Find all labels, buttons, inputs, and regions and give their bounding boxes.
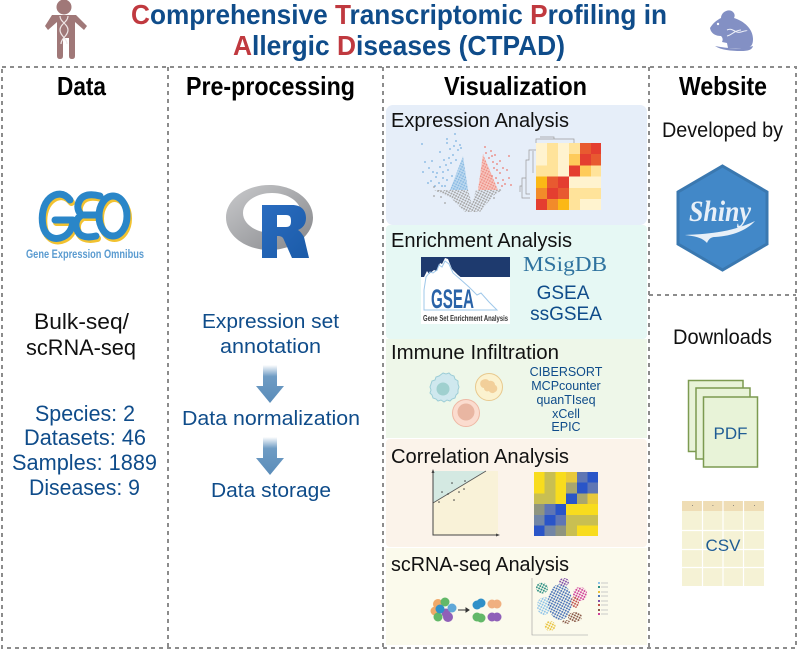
immune methods: CIBERSORT [530, 365, 603, 379]
heading: scRNA-seq analysis: scRNA-seq Analysis [391, 554, 569, 576]
title line 2: Allergic Diseases (CTPAD) [233, 30, 565, 61]
sequencing types [26, 309, 136, 360]
title [131, 0, 667, 61]
GSEA logo [421, 257, 510, 324]
step: expression set annotation: Expression set [202, 310, 339, 333]
panel: website column [662, 71, 783, 586]
CSV table [682, 501, 764, 586]
PDF document stack [688, 380, 758, 467]
step: data storage: Data storage [211, 479, 331, 502]
GSEA methods: ssGSEA [530, 304, 602, 325]
heading: website: Website [679, 71, 767, 101]
R logo [226, 185, 313, 258]
immune methods: xCell [552, 407, 580, 421]
dataset statistics: Diseases: 9 [29, 475, 140, 500]
GEO logo caption: Gene Expression Omnibus [26, 247, 144, 261]
heading: enrichment analysis: Enrichment Analysis [391, 230, 572, 252]
downloads label: Downloads [673, 326, 772, 349]
dataset statistics: Samples: 1889 [12, 450, 157, 475]
immune methods: quanTIseq [536, 393, 596, 407]
step: expression set annotation: annotation [220, 335, 321, 358]
sequencing types: Bulk-seq/ [34, 309, 130, 334]
t-SNE legend [598, 582, 608, 615]
MSigDB logo: MSigDB [523, 252, 607, 276]
panel: data column [12, 71, 157, 500]
icon: human with DNA [45, 0, 87, 59]
heatmap: expression [520, 137, 601, 210]
GEO logo [26, 194, 144, 261]
heading: data: Data [57, 71, 106, 101]
cells [430, 373, 502, 426]
panel: expression analysis [386, 105, 647, 225]
Shiny hexagon logo [678, 166, 767, 270]
heading: immune infiltration: Immune Infiltration [391, 342, 559, 364]
cell clustering diagram [430, 598, 502, 622]
scatter plot [432, 469, 500, 536]
GSEA methods [530, 283, 602, 325]
icon: mouse with DNA [710, 10, 753, 51]
dataset statistics: Datasets: 46 [24, 425, 146, 450]
step: data normalization: Data normalization [182, 407, 360, 430]
arrow: normalization to storage [256, 437, 284, 475]
heading: correlation analysis: Correlation Analysis [391, 446, 569, 468]
t-SNE plot [532, 578, 588, 635]
volcano plot [422, 134, 511, 212]
panel: enrichment analysis [386, 225, 647, 339]
immune methods: EPIC [551, 420, 581, 434]
GSEA logo wordmark: GSEA [431, 284, 474, 314]
step: expression set annotation [202, 310, 339, 358]
arrow: annotation to normalization [256, 365, 284, 403]
immune methods: MCPcounter [531, 379, 601, 393]
dataset statistics: Species: 2 [35, 401, 135, 426]
panel: scRNA-seq analysis [386, 548, 647, 645]
Shiny hexagon logo: Shiny [689, 195, 752, 228]
dataset statistics [12, 401, 157, 500]
GSEA methods: GSEA [537, 283, 590, 304]
PDF document stack: PDF [714, 424, 748, 443]
heading: expression analysis: Expression Analysis [391, 110, 569, 132]
panel: pre-processing column [182, 71, 360, 502]
heading: pre-processing: Pre-processing [186, 71, 355, 101]
GSEA logo caption: Gene Set Enrichment Analysis [423, 313, 508, 323]
heatmap: correlation [534, 472, 598, 536]
panel: immune infiltration [386, 339, 647, 438]
sequencing types: scRNA-seq [26, 335, 136, 360]
heading: visualization: Visualization [444, 71, 587, 101]
panel: correlation analysis [386, 439, 647, 547]
CSV table: CSV [706, 536, 741, 555]
developed by label: Developed by [662, 119, 783, 142]
immune methods [530, 365, 603, 434]
